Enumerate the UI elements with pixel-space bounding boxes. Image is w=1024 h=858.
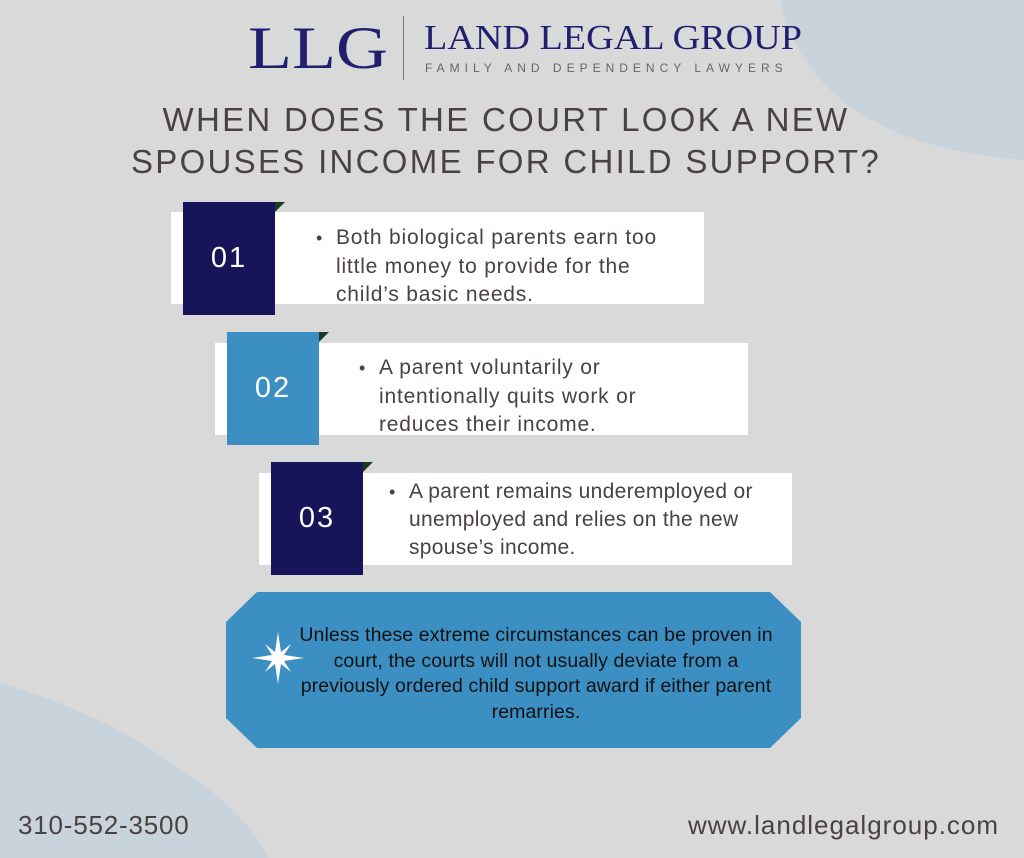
item 02: intentionally quits work or [379,384,636,408]
item 01: 01 [211,242,247,274]
phone: 310-552-3500 [18,810,190,840]
website: www.landlegalgroup.com [688,810,999,840]
item 02: reduces their income. [379,413,597,436]
callout: remarries. [492,700,580,722]
callout: court, the courts will not usually deviate from a [334,650,738,672]
item 01 [171,202,704,315]
logo [248,15,802,81]
item 02: A parent voluntarily or [379,356,601,379]
item 01: child’s basic needs. [336,283,534,306]
item 02: 02 [255,372,291,404]
item 03: unemployed and relies on the new [409,508,738,531]
item 01: little money to provide for the [336,254,630,278]
callout: previously ordered child support award if either parent [301,675,771,697]
callout [226,592,801,748]
title [131,101,881,180]
item 02 [215,332,748,445]
item 03: A parent remains underemployed or [409,480,753,503]
title: WHEN DOES THE COURT LOOK A NEW [163,101,849,138]
item 03: spouse’s income. [409,536,576,559]
icon: sparkle [252,632,304,684]
logo: LAND LEGAL GROUP [424,18,802,57]
item 01: Both biological parents earn too [336,226,657,249]
item 03: 03 [299,502,335,534]
callout: Unless these extreme circumstances can be proven in [299,624,773,646]
logo: LLG [248,15,388,81]
logo: FAMILY AND DEPENDENCY LAWYERS [425,61,788,75]
title: SPOUSES INCOME FOR CHILD SUPPORT? [131,143,881,180]
item 03 [259,462,792,575]
